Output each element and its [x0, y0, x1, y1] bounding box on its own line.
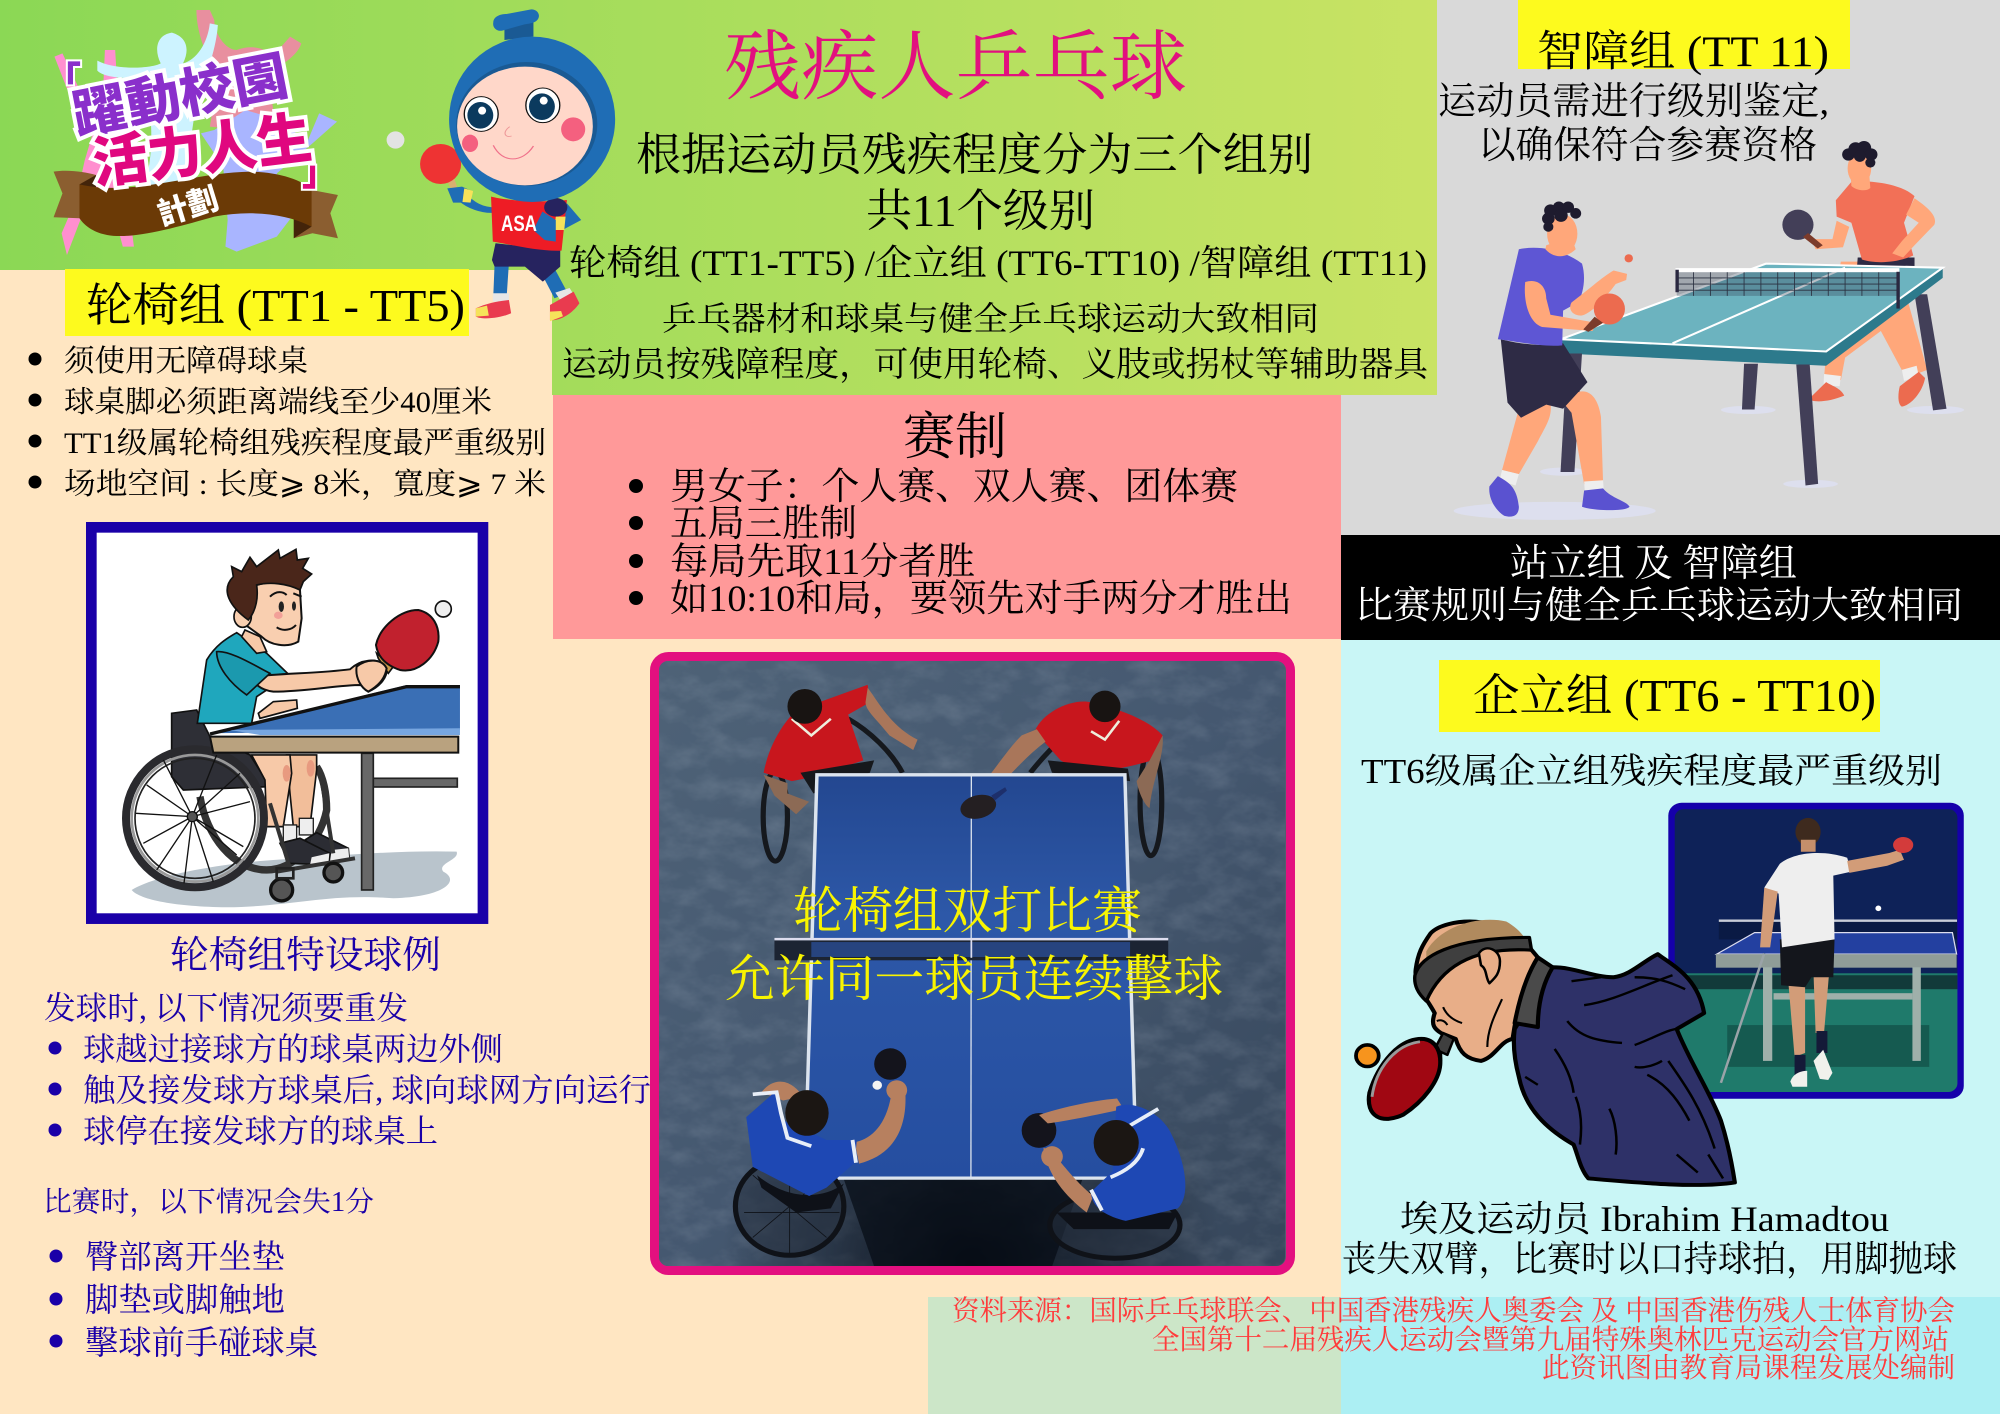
wheelchair rules list: 场地空间 : 长度⩾ 8米，寬度⩾ 7 米 — [64, 468, 546, 501]
bottom paddle — [874, 1048, 906, 1080]
table top — [805, 775, 1137, 1178]
sources: 全国第十二届残疾人运动会暨第九届特殊奥林匹克运动会官方网站 — [1152, 1324, 1949, 1356]
ball — [435, 601, 451, 617]
match format text — [629, 410, 1292, 620]
seat — [172, 710, 270, 790]
heading: intellectual group — [1518, 0, 1850, 76]
match format text: 男女子：个人赛、双人赛、团体赛 — [670, 466, 1239, 508]
standing group note: TT6级属企立组残疾程度最严重级别 — [1361, 752, 1942, 791]
wheelchair special rules: 触及接发球方球桌后, 球向球网方向运行 — [83, 1072, 651, 1108]
header text block: 根据运动员残疾程度分为三个组别 — [636, 130, 1313, 180]
hair — [227, 549, 312, 620]
table top — [1561, 264, 1943, 351]
table leg — [362, 753, 457, 890]
shirt folds — [1525, 975, 1723, 1178]
header text block: 共11个级别 — [866, 186, 1095, 236]
arm — [253, 661, 387, 692]
logo quotes: 「 — [45, 59, 81, 100]
black note text — [1355, 543, 1963, 627]
logo line 2: 活力人生 — [89, 106, 315, 195]
mascot shirt text: ASA — [501, 211, 537, 236]
logo plan label: 計劃 — [153, 181, 223, 232]
black note text: 站立组 及 智障组 — [1510, 543, 1797, 585]
foot plate and frame — [270, 780, 355, 872]
wheelchair special rules: 擊球前手碰球桌 — [85, 1325, 318, 1362]
heading: standing group — [1439, 660, 1880, 732]
intellectual group text: 以确保符合参赛资格 — [1478, 125, 1817, 167]
top left player — [764, 685, 918, 814]
shorts — [492, 243, 560, 282]
bottom right player — [1039, 1098, 1185, 1221]
wheelchair rules list — [28, 345, 546, 501]
panel: grey intellectual group — [1341, 0, 2000, 536]
photo caption: 允许同一球员连续擊球 — [725, 951, 1223, 1007]
main wheel — [126, 749, 264, 887]
bottom left player — [746, 1080, 907, 1196]
top hand paddle — [960, 794, 996, 819]
net — [1675, 268, 1900, 309]
wheelchair special rules: 球停在接发球方的球桌上 — [83, 1113, 438, 1149]
right player — [1782, 141, 1935, 407]
curly hair — [1542, 201, 1581, 232]
athlete caption: 埃及运动员 Ibrahim Hamadtou — [1400, 1199, 1889, 1239]
face lines — [1437, 999, 1502, 1047]
paddle — [446, 177, 457, 190]
table — [210, 685, 460, 733]
title: 残疾人乒乓球 — [724, 26, 1187, 110]
logo: campus programme: 」 — [302, 152, 338, 193]
floor shadow — [132, 851, 457, 907]
paddle — [1428, 1045, 1441, 1069]
athlete caption: 丧失双臂，比赛时以口持球拍，用脚抛球 — [1342, 1239, 1957, 1279]
top wheels — [763, 719, 1162, 861]
head — [1416, 922, 1538, 1061]
ribbon banner — [54, 171, 338, 238]
intellectual group text: 运动员需进行级别鉴定, — [1438, 81, 1829, 123]
intellectual group text — [1438, 81, 1829, 167]
wheelchair special rules: 脚垫或脚触地 — [85, 1282, 285, 1319]
far forearm — [258, 700, 297, 718]
bottom left wheel — [735, 1157, 844, 1255]
far wheel — [200, 767, 327, 870]
illustration: two standing players at table — [1454, 141, 1964, 520]
illustration: wheelchair player card — [86, 522, 488, 924]
logo: campus programme — [45, 10, 338, 255]
bottom right wheel — [1050, 1192, 1180, 1258]
wheelchair special rules: 臀部离开坐垫 — [85, 1239, 285, 1276]
shoulder — [544, 198, 567, 217]
front table leg — [1796, 365, 1818, 486]
black note text: 比赛规则与健全乒乓球运动大致相同 — [1355, 585, 1963, 627]
panel: standing group — [1341, 640, 2000, 1414]
hand — [533, 212, 556, 242]
shirt — [491, 197, 567, 251]
ear — [1479, 948, 1500, 983]
shirt — [197, 633, 289, 723]
left player — [1489, 201, 1633, 517]
socks and shoes — [283, 818, 313, 845]
head — [243, 582, 302, 645]
match format text: 如10:10和局，要领先对手两分才胜出 — [670, 578, 1292, 620]
hood — [504, 15, 533, 40]
photo caption — [725, 883, 1223, 1007]
header text block: 轮椅组 (TT1-TT5) /企立组 (TT6-TT10) /智障组 (TT11) — [569, 243, 1427, 283]
paddle — [377, 653, 393, 673]
far legs — [287, 755, 317, 827]
panel: match format — [553, 395, 1341, 639]
heading: standing group: 企立组 (TT6 - TT10) — [1473, 671, 1876, 721]
wheelchair rules list: TT1级属轮椅组残疾程度最严重级别 — [64, 427, 546, 460]
match format text: 每局先取11分者胜 — [670, 541, 975, 583]
photo caption: 轮椅组双打比赛 — [793, 883, 1142, 939]
silhouettes — [54, 10, 337, 255]
panel: black note — [1341, 535, 2000, 640]
heading: intellectual group: 智障组 (TT 11) — [1537, 28, 1829, 76]
wheelchair special rules: 轮椅组特设球例 — [170, 935, 441, 977]
legs — [493, 263, 568, 298]
eyes — [464, 97, 498, 131]
collar — [1515, 957, 1553, 1027]
illustration: Hamadtou bust — [1356, 920, 1735, 1185]
hand — [356, 661, 387, 692]
header text block: 运动员按残障程度，可使用轮椅、义肢或拐杖等辅助器具 — [562, 346, 1430, 384]
wheelchair rules list: 须使用无障碍球桌 — [64, 345, 308, 378]
net — [774, 938, 1168, 960]
curly hair — [1842, 141, 1877, 168]
face — [457, 67, 593, 185]
hair — [1426, 920, 1529, 959]
player legs — [1788, 981, 1805, 1057]
photo: wheelchair doubles — [654, 656, 1290, 1270]
photo: standing player with crutch — [1668, 803, 1964, 1099]
far table legs — [1742, 364, 1758, 410]
headband — [1415, 937, 1532, 1001]
heading: wheelchair group: 轮椅组 (TT1 - TT5) — [86, 280, 465, 331]
wheelchair special rules — [43, 935, 651, 1362]
torso — [1764, 853, 1851, 947]
shirt — [1514, 954, 1735, 1185]
header text block: 乒乓器材和球桌与健全乒乓球运动大致相同 — [662, 301, 1319, 338]
panel: source strip — [928, 1297, 2000, 1414]
shadows — [1454, 406, 1964, 520]
wheelchair rules list: 球桌脚必须距离端线至少40厘米 — [64, 386, 492, 419]
shadow under lower players — [844, 1179, 1082, 1266]
header text block — [562, 130, 1430, 384]
wheelchair special rules: 发球时, 以下情况须要重发 — [44, 990, 408, 1026]
ball — [387, 131, 404, 149]
neck — [242, 630, 267, 653]
sources: 资料来源：国际乒乓球联会、中国香港残疾人奥委会 及 中国香港伤残人士体育协会 — [952, 1295, 1955, 1327]
match format text: 赛制 — [903, 410, 1007, 466]
arm — [460, 193, 496, 212]
top right player — [974, 691, 1163, 808]
athlete caption — [1342, 1199, 1957, 1279]
card frame — [86, 522, 488, 924]
logo line 1: 躍動校園 — [68, 47, 293, 146]
sources — [952, 1295, 1955, 1384]
wheelchair special rules: 比赛时，以下情况会失1分 — [43, 1186, 374, 1218]
wheelchair special rules: 球越过接球方的球桌两边外侧 — [83, 1031, 503, 1067]
mascot — [387, 9, 615, 321]
panel: green header — [0, 0, 1437, 395]
sources: 此资讯图由教育局课程发展处编制 — [1542, 1352, 1955, 1384]
match format text: 五局三胜制 — [670, 503, 857, 545]
ball — [1356, 1045, 1379, 1066]
